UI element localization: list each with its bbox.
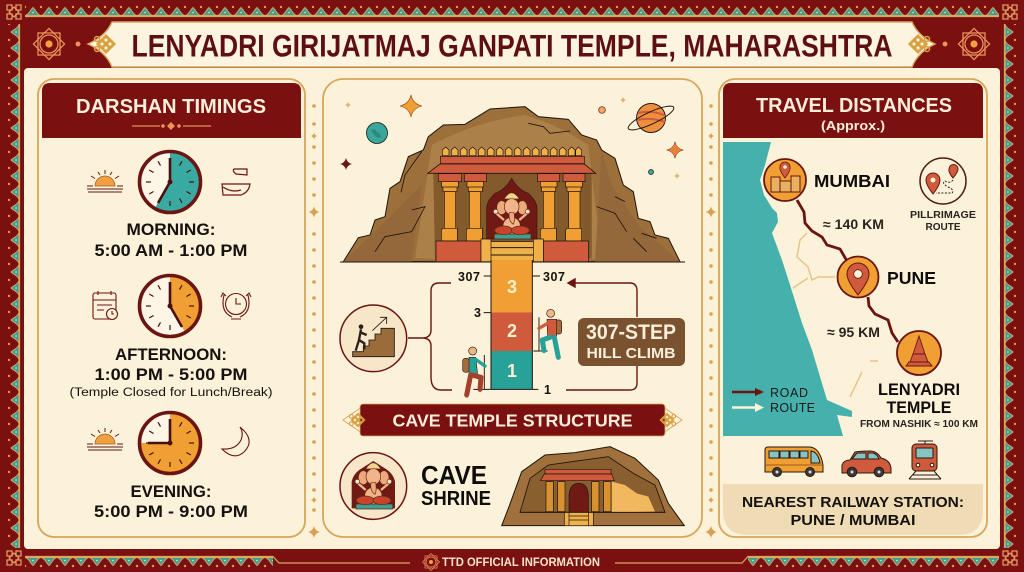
text: morning: 5:00 AM - 1:00 PM (94, 242, 248, 260)
icon: crescent moon (222, 427, 249, 456)
sparkle stars (340, 95, 683, 179)
text: evening: 5:00 PM - 9:00 PM (94, 503, 248, 521)
step numbers: 1 (507, 361, 517, 381)
step scale labels: 1 (544, 383, 551, 397)
panel: travel distances (719, 79, 987, 537)
label: 307-step hill climb: 307-STEP (586, 321, 676, 344)
clock: evening (140, 412, 200, 474)
clock: morning (140, 152, 200, 212)
heading: travel distances: (Approx.) (821, 118, 885, 133)
step numbers (507, 277, 517, 381)
hiker: lower left (463, 347, 485, 395)
text: morning (94, 221, 248, 260)
icon: bus (765, 447, 823, 476)
legend: road route: ROUTE (770, 401, 815, 415)
label: pilgrimage route (910, 209, 976, 233)
icon: car (842, 451, 891, 477)
label: lenyadri temple: LENYADRI (878, 381, 960, 399)
arrow: climb direction (566, 279, 637, 390)
icon: pilgrimage route (920, 158, 966, 204)
label: pilgrimage route: ROUTE (926, 221, 960, 233)
illustration: small cave shrine (502, 447, 684, 526)
icon: ringed planet (626, 102, 676, 134)
callout: nearest railway station (723, 484, 983, 535)
label: 307-step hill climb (578, 318, 685, 366)
callout: nearest railway station: PUNE / MUMBAI (790, 512, 916, 529)
legend: road route: ROAD (770, 386, 808, 400)
panel: temple and climb (323, 79, 702, 537)
illustration: cave temple in mountain (340, 107, 685, 262)
heading: travel distances: TRAVEL DISTANCES (756, 95, 952, 117)
heading: travel distances (756, 95, 952, 133)
distance: pune to lenyadri: ≈ 95 KM (827, 324, 880, 340)
steps column (473, 260, 548, 389)
clock: afternoon (140, 276, 200, 336)
heading ornament (132, 122, 211, 130)
banner: cave temple structure (343, 404, 682, 436)
icon: stairs climb (340, 305, 407, 372)
title text: LENYADRI GIRIJATMAJ GANPATI TEMPLE, MAHARASHTRA (132, 28, 892, 64)
text: afternoon (70, 346, 273, 399)
label: pilgrimage route: PILLRIMAGE (910, 209, 976, 221)
step scale labels: 307 (543, 270, 565, 284)
label: cave shrine: SHRINE (421, 488, 491, 510)
label: cave shrine (421, 460, 491, 510)
label: lenyadri temple: TEMPLE (886, 399, 952, 417)
map pin: mumbai (764, 159, 806, 201)
heading: darshan timings: DARSHAN TIMINGS (76, 96, 266, 118)
title banner (33, 22, 990, 67)
icon: calendar (93, 291, 118, 320)
label: pune: PUNE (887, 268, 936, 288)
map: sea (723, 142, 852, 436)
text: afternoon: 1:00 PM - 5:00 PM (94, 366, 248, 384)
distance: mumbai to pune: ≈ 140 KM (823, 217, 884, 232)
bracket from stairs icon (408, 283, 452, 390)
map: minor roads (793, 233, 878, 397)
label: cave shrine: CAVE (421, 460, 487, 490)
map: road route (797, 200, 898, 342)
icon: alarm clock (221, 293, 251, 319)
banner: cave temple structure: CAVE TEMPLE STRUCTURE (392, 410, 632, 430)
step numbers: 3 (507, 277, 517, 297)
text: afternoon: (Temple Closed for Lunch/Break) (70, 387, 273, 399)
step scale labels: 3 (474, 306, 481, 320)
text: afternoon: AFTERNOON: (115, 346, 227, 364)
panel: darshan timings (38, 79, 305, 537)
icon: teal planet (366, 122, 388, 144)
dotted dividers (308, 104, 717, 538)
map pin: pune (838, 256, 878, 298)
footer: official information (422, 553, 600, 571)
label: 307-step hill climb: HILL CLIMB (586, 345, 676, 362)
icon: sunset (87, 428, 123, 450)
step numbers: 2 (507, 321, 517, 341)
hiker: upper right (539, 309, 562, 357)
step scale labels (458, 270, 565, 397)
legend: road route (732, 386, 815, 415)
label: mumbai: MUMBAI (814, 171, 890, 191)
label: lenyadri temple (860, 381, 978, 430)
map pin: lenyadri temple (897, 331, 941, 375)
label: lenyadri temple: FROM NASHIK ≈ 100 KM (860, 419, 978, 430)
icon: ganesha shrine (340, 453, 407, 519)
text: evening: EVENING: (130, 483, 212, 501)
text: evening (94, 483, 248, 521)
footer: official information: TTD OFFICIAL INFORMATION (442, 555, 600, 569)
step scale labels: 307 (458, 270, 480, 284)
icon: sunrise (87, 170, 123, 192)
text: morning: MORNING: (126, 221, 216, 239)
callout: nearest railway station: NEAREST RAILWAY STATION: (742, 494, 964, 511)
icon: train (909, 441, 941, 479)
icon: offering bowl (222, 169, 250, 195)
